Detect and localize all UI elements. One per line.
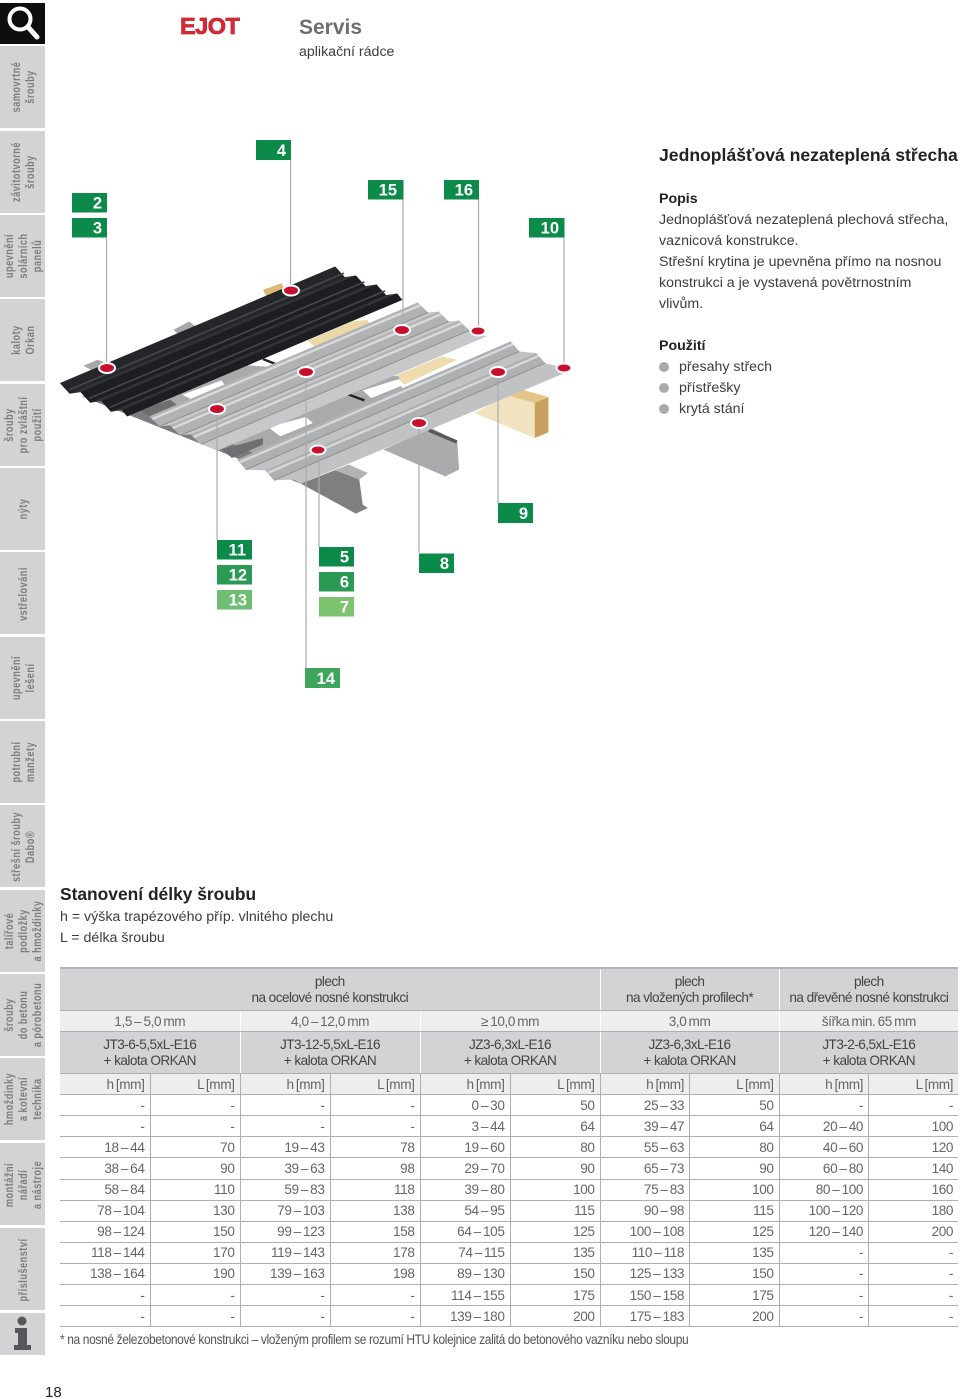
label 13: 13: [229, 592, 247, 610]
tab: šrouby do betonu a pórobetonu: do betonu: [18, 991, 30, 1039]
label 5: 5: [340, 548, 349, 566]
table header: support type: 130: [213, 1203, 234, 1218]
table header: support type: 64: [580, 1119, 595, 1134]
table header: support type: 38 – 64: [104, 1161, 144, 1176]
tab: závitotvorné šrouby: závitotvorné: [11, 142, 23, 202]
table header: support type: 190: [213, 1266, 234, 1281]
table: screw lengths: [60, 967, 958, 1327]
table header: support type: 110 – 118: [632, 1245, 684, 1260]
table row: products: [60, 1032, 958, 1073]
table header: support type: -: [320, 1119, 324, 1134]
table header: support type: 170: [213, 1245, 234, 1260]
tab: samovrtné šrouby: samovrtné: [11, 62, 23, 112]
tab: talířové podložky a hmoždinky: [0, 890, 45, 972]
tab: montážní nářadí a nástroje: montážní: [4, 1162, 16, 1207]
tab: hmoždinky a kotevní technika: technika: [32, 1078, 44, 1120]
table header: support type: 178: [393, 1245, 414, 1260]
tab: vstřelování: [0, 552, 45, 634]
table header: support type: 100 – 120: [809, 1203, 863, 1218]
table header: support type: 175 – 183: [630, 1309, 684, 1324]
label 14: [305, 668, 340, 688]
roof illustration: [60, 140, 572, 688]
table row: products: JT3-12-5,5xL-E16: [280, 1037, 380, 1052]
table header: support type: plech: [675, 974, 704, 988]
table header: support type: 29 – 70: [464, 1161, 504, 1176]
table row: thickness: 4,0 – 12,0 mm: [291, 1014, 369, 1029]
label 14: 14: [317, 670, 336, 688]
table header: support type: -: [949, 1288, 953, 1303]
table header: support type: 80 – 100: [816, 1182, 863, 1197]
table header: support type: 100: [752, 1182, 774, 1197]
tab: střešní šrouby Dabo: [0, 805, 45, 887]
table header: support type: -: [859, 1309, 863, 1324]
label 8: 8: [440, 555, 449, 573]
tab: upevnění lešení: [0, 637, 45, 719]
table header: support type: -: [140, 1098, 144, 1113]
subheading: aplikační rádce: aplikační rádce: [299, 44, 394, 60]
tab: talířové podložky a hmoždinky: podložky: [18, 909, 30, 953]
table header: support type: 98: [400, 1161, 414, 1176]
tab: šrouby pro zvláštní použití: [0, 384, 45, 466]
icon: info tab: [0, 1313, 45, 1355]
table header: support type: 18 – 44: [104, 1140, 144, 1155]
label 9: [498, 503, 533, 523]
bullet list: přesahy střech: [679, 359, 772, 375]
icon: search tab: [0, 3, 45, 44]
steel beam: rear: [383, 428, 459, 476]
table header: support type: 3 – 44: [472, 1119, 504, 1134]
table header: support type: 100: [573, 1182, 595, 1197]
table row: products: + kalota ORKAN: [104, 1053, 196, 1068]
table header: support type: -: [949, 1266, 953, 1281]
tab: upevnění lešení: lešení: [25, 663, 37, 692]
tab: montážní nářadí a nástroje: [0, 1143, 45, 1225]
table header: support type: 90: [759, 1161, 774, 1176]
table row: thickness: 3,0 mm: [669, 1014, 710, 1029]
table header: support type: -: [320, 1288, 324, 1303]
table header: support type: 118: [394, 1182, 414, 1197]
table header: support type: -: [410, 1098, 414, 1113]
table row: products: + kalota ORKAN: [823, 1053, 915, 1068]
table row: products: JZ3-6,3xL-E16: [469, 1037, 551, 1052]
table row: thickness: ≥ 10,0 mm: [481, 1014, 539, 1029]
table header: support type: 150: [752, 1266, 774, 1281]
table header: support type: 70: [220, 1140, 234, 1155]
table row: products: JZ3-6,3xL-E16: [649, 1037, 731, 1052]
table header: support type: 59 – 83: [284, 1182, 324, 1197]
table header: support type: -: [410, 1309, 414, 1324]
table row: products: JT3-6-5,5xL-E16: [103, 1037, 196, 1052]
table header: support type: 135: [573, 1245, 595, 1260]
table header: support type: 90: [580, 1161, 595, 1176]
logo: EJOT: EJOT: [180, 13, 239, 39]
table row: units: L [mm]: [557, 1077, 595, 1092]
table header: support type: -: [859, 1245, 863, 1260]
text block: Použití: [659, 338, 772, 417]
table header: support type: -: [320, 1309, 324, 1324]
tab: kaloty Orkan: Orkan: [25, 326, 37, 354]
table header: support type: -: [230, 1288, 234, 1303]
table header: support type: 198: [393, 1266, 414, 1281]
table header: support type: na ocelové nosné konstrukci: [251, 990, 408, 1004]
table header: support type: 200: [573, 1309, 595, 1324]
table header: support type: 120 – 140: [809, 1224, 863, 1239]
base sheet: [82, 343, 404, 484]
table header: support type: 100: [932, 1119, 953, 1134]
table header: support type: 40 – 60: [823, 1140, 863, 1155]
label 3: [72, 218, 107, 238]
table row: units: h [mm]: [825, 1077, 863, 1092]
table header: support type: 75 – 83: [644, 1182, 684, 1197]
label 16: 16: [455, 182, 473, 200]
label 11: [217, 540, 252, 560]
tab: upevnění lešení: upevnění: [11, 655, 23, 700]
table row: thickness: [60, 1011, 958, 1031]
label 15: [368, 180, 404, 200]
table row: units: L [mm]: [377, 1077, 414, 1092]
text block: legend h and L: [60, 909, 333, 946]
table row: units: h [mm]: [287, 1077, 324, 1092]
sidebar navigation: [0, 3, 45, 1355]
tab: šrouby do betonu a pórobetonu: a pórobetonu: [32, 983, 44, 1047]
steel beam: front: [301, 465, 368, 514]
table header: support type: 200: [932, 1224, 953, 1239]
tab: šrouby do betonu a pórobetonu: šrouby: [4, 998, 16, 1032]
number labels: [72, 140, 564, 688]
table header: support type: 150 – 158: [630, 1288, 684, 1303]
table header: support type: 138 – 164: [90, 1266, 144, 1281]
table header: support type: 64: [759, 1119, 774, 1134]
tab: potrubní manžety: [0, 721, 45, 803]
text block: Popis: vaznicová konstrukce.: [659, 233, 799, 249]
text block: Použití: Použití: [659, 338, 706, 354]
tab: samovrtné šrouby: [0, 46, 45, 128]
table header: support type: 80: [580, 1140, 595, 1155]
tab: šrouby pro zvláštní použití: použití: [32, 408, 44, 441]
table header: support type: -: [410, 1119, 414, 1134]
table header: support type: 200: [752, 1309, 774, 1324]
label 3: 3: [93, 220, 102, 238]
label 4: 4: [277, 142, 287, 160]
table row: units: h [mm]: [646, 1077, 684, 1092]
table header: support type: 125 – 133: [630, 1266, 684, 1281]
table header: support type: -: [949, 1098, 953, 1113]
table row: units: L [mm]: [916, 1077, 953, 1092]
label 6: 6: [340, 574, 349, 592]
table header: support type: 39 – 80: [464, 1182, 504, 1197]
text block: legend h and L: h = výška trapézového příp. vlnitého plechu: [60, 909, 333, 925]
table row: thickness: 1,5 – 5,0 mm: [114, 1014, 185, 1029]
table row: thickness: šířka min. 65 mm: [822, 1014, 916, 1029]
table header: support type: 180: [932, 1203, 953, 1218]
brackets: [83, 321, 196, 370]
leader lines: [106, 160, 564, 668]
bullet list: [659, 359, 772, 417]
text block: Popis: [659, 191, 948, 312]
table header: support type: -: [859, 1288, 863, 1303]
sheet: silver lower: [237, 341, 573, 484]
table header: support type: -: [949, 1245, 953, 1260]
tab: upevnění solárních panelů: solárních: [18, 233, 30, 279]
table row: units: h [mm]: [107, 1077, 144, 1092]
label 15: 15: [379, 182, 397, 200]
table header: support type: 78: [400, 1140, 414, 1155]
table header: support type: 65 – 73: [644, 1161, 684, 1176]
table header: support type: na vložených profilech*: [626, 990, 753, 1004]
label 7: 7: [340, 598, 349, 616]
table header: support type: -: [230, 1098, 234, 1113]
table header: support type: 50: [759, 1098, 774, 1113]
tab: upevnění solárních panelů: [0, 215, 45, 297]
table header: support type: 135: [752, 1245, 774, 1260]
table header: support type: 90: [220, 1161, 234, 1176]
table header: support type: 79 – 103: [277, 1203, 324, 1218]
table header: support type: 74 – 115: [458, 1245, 504, 1260]
table row: units: h [mm]: [467, 1077, 504, 1092]
tab: potrubní manžety: manžety: [25, 742, 37, 782]
table row: units: L [mm]: [736, 1077, 774, 1092]
table header: support type: 98 – 124: [97, 1224, 144, 1239]
table header: support type: 150: [573, 1266, 595, 1281]
table header: support type: 125: [573, 1224, 595, 1239]
footnote: * na nosné železobetonové konstrukci – vloženým profilem se rozumí HTU kolejnice zalitá do betonového vazníku nebo sloupu: [60, 1332, 688, 1347]
tab: potrubní manžety: potrubní: [11, 741, 23, 783]
sheet: silver upper: [149, 302, 487, 450]
table header: support type: 80: [759, 1140, 774, 1155]
tab: šrouby pro zvláštní použití: pro zvláštní: [18, 396, 30, 453]
table header: support type: 58 – 84: [104, 1182, 144, 1197]
tab: závitotvorné šrouby: šrouby: [25, 155, 37, 189]
table header: support type: 25 – 33: [644, 1098, 684, 1113]
table header: support type: 118 – 144: [91, 1245, 144, 1260]
heading: Servis: Servis: [299, 16, 362, 39]
tab: samovrtné šrouby: šrouby: [25, 70, 37, 104]
table header: support type: 100 – 108: [630, 1224, 684, 1239]
table header: support type: 125: [752, 1224, 774, 1239]
tab: hmoždinky a kotevní technika: a kotevní: [18, 1076, 30, 1121]
roof structure: [60, 267, 573, 514]
table header: support type: 0 – 30: [472, 1098, 504, 1113]
text block: Popis: vlivům.: [659, 296, 703, 312]
table row: products: + kalota ORKAN: [643, 1053, 736, 1068]
text block: Popis: Jednoplášťová nezateplená plechová střecha,: [659, 212, 948, 228]
table header: support type: 39 – 63: [284, 1161, 324, 1176]
table header: support type: 55 – 63: [644, 1140, 684, 1155]
tab: šrouby pro zvláštní použití: šrouby: [4, 408, 16, 442]
tab: talířové podložky a hmoždinky: a hmoždinky: [32, 901, 44, 961]
table header: support type: 60 – 80: [823, 1161, 863, 1176]
label 10: 10: [541, 220, 559, 238]
label 5: [319, 547, 354, 566]
tab: montážní nářadí a nástroje: nářadí: [18, 1169, 30, 1200]
title: Jednoplášťová nezateplená střecha: [659, 145, 958, 165]
table header: support type: 90 – 98: [644, 1203, 684, 1218]
fixing points: [99, 286, 572, 454]
text block: Popis: Střešní krytina je upevněna přímo na nosnou: [659, 254, 941, 270]
bullet list: krytá stání: [679, 401, 744, 417]
label 8: [419, 554, 454, 573]
table header: support type: -: [859, 1098, 863, 1113]
table header: support type: 175: [752, 1288, 774, 1303]
tab: šrouby do betonu a pórobetonu: [0, 974, 45, 1056]
text block: Popis: Popis: [659, 191, 698, 207]
table header: support type: 19 – 43: [284, 1140, 324, 1155]
table header: support type: -: [140, 1119, 144, 1134]
table header: support type: 54 – 95: [464, 1203, 504, 1218]
tab: hmoždinky a kotevní technika: hmoždinky: [4, 1073, 16, 1125]
label 11: 11: [229, 542, 246, 560]
tab: příslušenství: [0, 1228, 45, 1310]
label 2: 2: [93, 194, 102, 212]
label 4: [256, 140, 291, 160]
table header: support type: 78 – 104: [97, 1203, 144, 1218]
table header: support type: 160: [932, 1182, 953, 1197]
table header: support type: 110: [214, 1182, 234, 1197]
table header: support type: plech: [315, 974, 345, 988]
tab: střešní šrouby Dabo: střešní šrouby: [11, 812, 23, 882]
label 2: [72, 193, 107, 212]
table row: products: + kalota ORKAN: [464, 1053, 556, 1068]
table header: support type: 99 – 123: [277, 1224, 324, 1239]
table header: support type: 19 – 60: [464, 1140, 504, 1155]
table header: support type: na dřevěné nosné konstrukci: [789, 990, 948, 1004]
label 16: [444, 180, 479, 200]
table header: support type: -: [859, 1266, 863, 1281]
label 13: [217, 590, 252, 610]
tab: nýty: [0, 468, 45, 550]
table header: support type: [60, 969, 958, 1324]
text block: legend h and L: L = délka šroubu: [60, 930, 165, 946]
tab: příslušenství: příslušenství: [18, 1238, 30, 1301]
label 12: 12: [229, 566, 247, 584]
table header: support type: 89 – 130: [457, 1266, 504, 1281]
table header: support type: 115: [574, 1203, 595, 1218]
table header: support type: 119 – 143: [271, 1245, 324, 1260]
table header: support type: -: [949, 1309, 953, 1324]
tab: upevnění solárních panelů: upevnění: [4, 233, 16, 278]
table header: support type: 120: [932, 1140, 953, 1155]
label 7: [319, 597, 354, 616]
table header: support type: 138: [393, 1203, 414, 1218]
label 6: [319, 572, 354, 592]
tab: střešní šrouby Dabo: Dabo®: [25, 831, 37, 863]
tab: montážní nářadí a nástroje: a nástroje: [32, 1161, 44, 1209]
table header: support type: 64 – 105: [457, 1224, 504, 1239]
table header: support type: -: [410, 1288, 414, 1303]
table header: support type: 175: [573, 1288, 595, 1303]
text block: Popis: konstrukci a je vystavená povětrnostním: [659, 275, 911, 291]
table header: support type: -: [230, 1309, 234, 1324]
label 10: [529, 218, 564, 238]
heading: Stanovení délky šroubu: Stanovení délky šroubu: [60, 884, 256, 904]
table row: products: + kalota ORKAN: [284, 1053, 376, 1068]
table header: support type: -: [230, 1119, 234, 1134]
sheet: black: [60, 267, 402, 416]
table header: support type: 115: [753, 1203, 774, 1218]
table header: support type: 139 – 180: [450, 1309, 504, 1324]
table header: support type: 114 – 155: [451, 1288, 504, 1303]
table header: support type: 20 – 40: [823, 1119, 863, 1134]
table header: support type: 39 – 47: [644, 1119, 684, 1134]
table header: support type: -: [140, 1309, 144, 1324]
tab: vstřelování: vstřelování: [18, 567, 30, 621]
table header: support type: 158: [393, 1224, 414, 1239]
tab: hmoždinky a kotevní technika: [0, 1058, 45, 1140]
table header: support type: 50: [580, 1098, 595, 1113]
bullet list: přístřešky: [679, 380, 740, 396]
table header: support type: plech: [854, 974, 884, 988]
tab: upevnění solárních panelů: panelů: [31, 240, 44, 272]
tab: talířové podložky a hmoždinky: talířové: [4, 913, 16, 949]
label 9: 9: [519, 505, 528, 523]
table header: support type: 139 – 163: [270, 1266, 324, 1281]
table header: support type: 140: [932, 1161, 953, 1176]
wood beams: [263, 283, 548, 438]
tab: kaloty Orkan: [0, 299, 45, 381]
table row: units: L [mm]: [197, 1077, 234, 1092]
table row: units: [60, 1074, 958, 1094]
tab: nýty: nýty: [18, 499, 30, 519]
table header: support type: 150: [213, 1224, 234, 1239]
label 12: [217, 565, 252, 584]
tab: závitotvorné šrouby: [0, 131, 45, 213]
table header: support type: -: [140, 1288, 144, 1303]
table header: support type: -: [320, 1098, 324, 1113]
table row: products: JT3-2-6,5xL-E16: [822, 1037, 915, 1052]
tab: kaloty Orkan: kaloty: [11, 325, 23, 355]
